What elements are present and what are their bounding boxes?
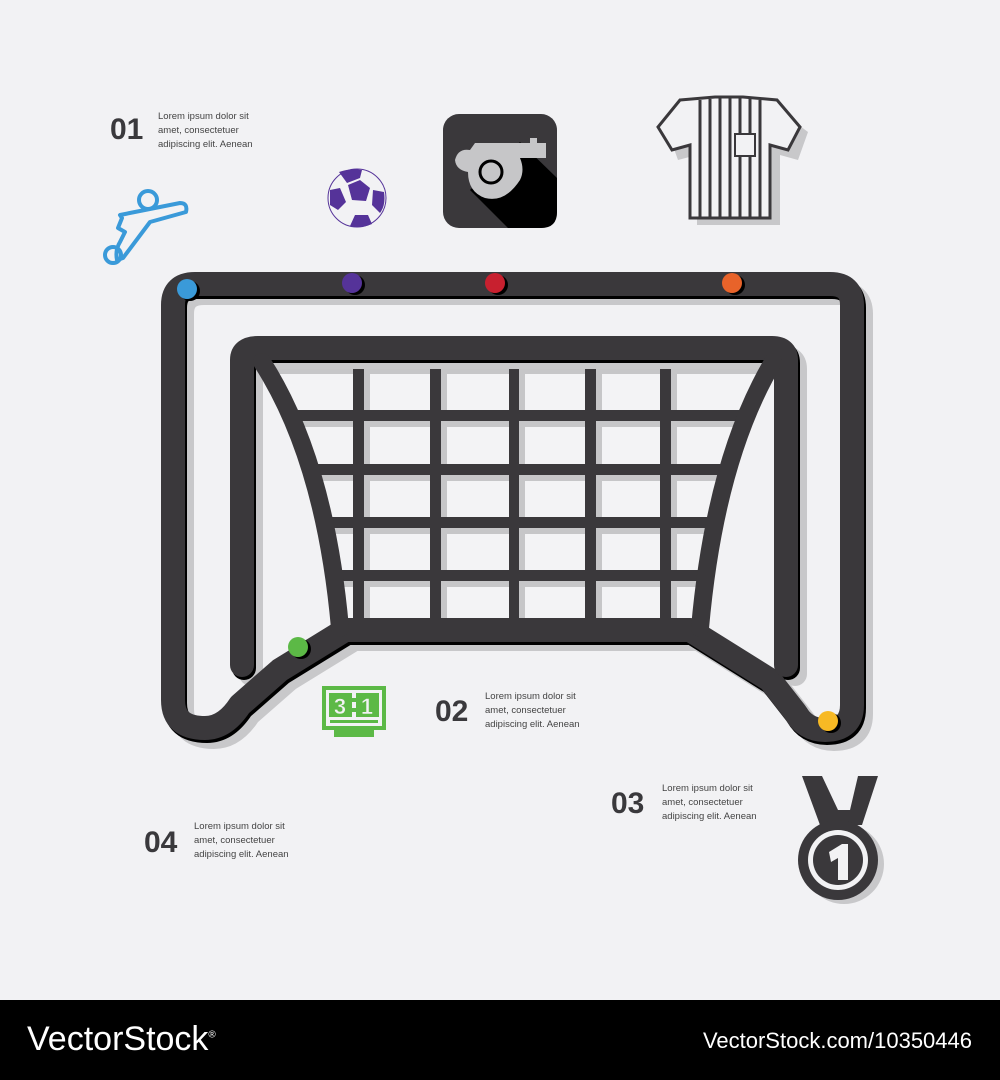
icon: soccer ball <box>328 169 386 227</box>
text: 03 <box>611 787 644 820</box>
text: amet, consectetuer <box>158 125 239 136</box>
item 03 <box>611 783 757 822</box>
footer watermark bar: VectorStock® <box>27 1020 216 1058</box>
text: 02 <box>435 695 468 728</box>
goal frame and track <box>173 284 861 739</box>
icon: player <box>105 191 186 263</box>
text: amet, consectetuer <box>194 835 275 846</box>
item 04 <box>144 821 289 860</box>
icon: scoreboard <box>322 686 386 737</box>
item 02 <box>435 691 580 730</box>
text: Lorem ipsum dolor sit <box>158 111 249 122</box>
icon: scoreboard: 1 <box>361 694 373 719</box>
text: adipiscing elit. Aenean <box>662 811 757 822</box>
icon: scoreboard: 3 <box>334 694 346 719</box>
item 01 <box>110 111 253 150</box>
text: Lorem ipsum dolor sit <box>485 691 576 702</box>
icon: referee shirt <box>658 97 808 225</box>
text: 01 <box>110 113 143 146</box>
text: Lorem ipsum dolor sit <box>662 783 753 794</box>
text: adipiscing elit. Aenean <box>194 849 289 860</box>
icon: medal <box>798 776 884 904</box>
text: adipiscing elit. Aenean <box>158 139 253 150</box>
graphic: goal track and icons <box>103 96 884 904</box>
icon: whistle <box>443 114 557 228</box>
footer watermark bar: VectorStock.com/10350446 <box>703 1028 972 1053</box>
goal net <box>277 369 758 618</box>
text: Lorem ipsum dolor sit <box>194 821 285 832</box>
text: adipiscing elit. Aenean <box>485 719 580 730</box>
dots on track <box>177 273 841 733</box>
text: 04 <box>144 826 177 859</box>
text: amet, consectetuer <box>662 797 743 808</box>
footer watermark bar <box>0 1000 1000 1080</box>
text: amet, consectetuer <box>485 705 566 716</box>
